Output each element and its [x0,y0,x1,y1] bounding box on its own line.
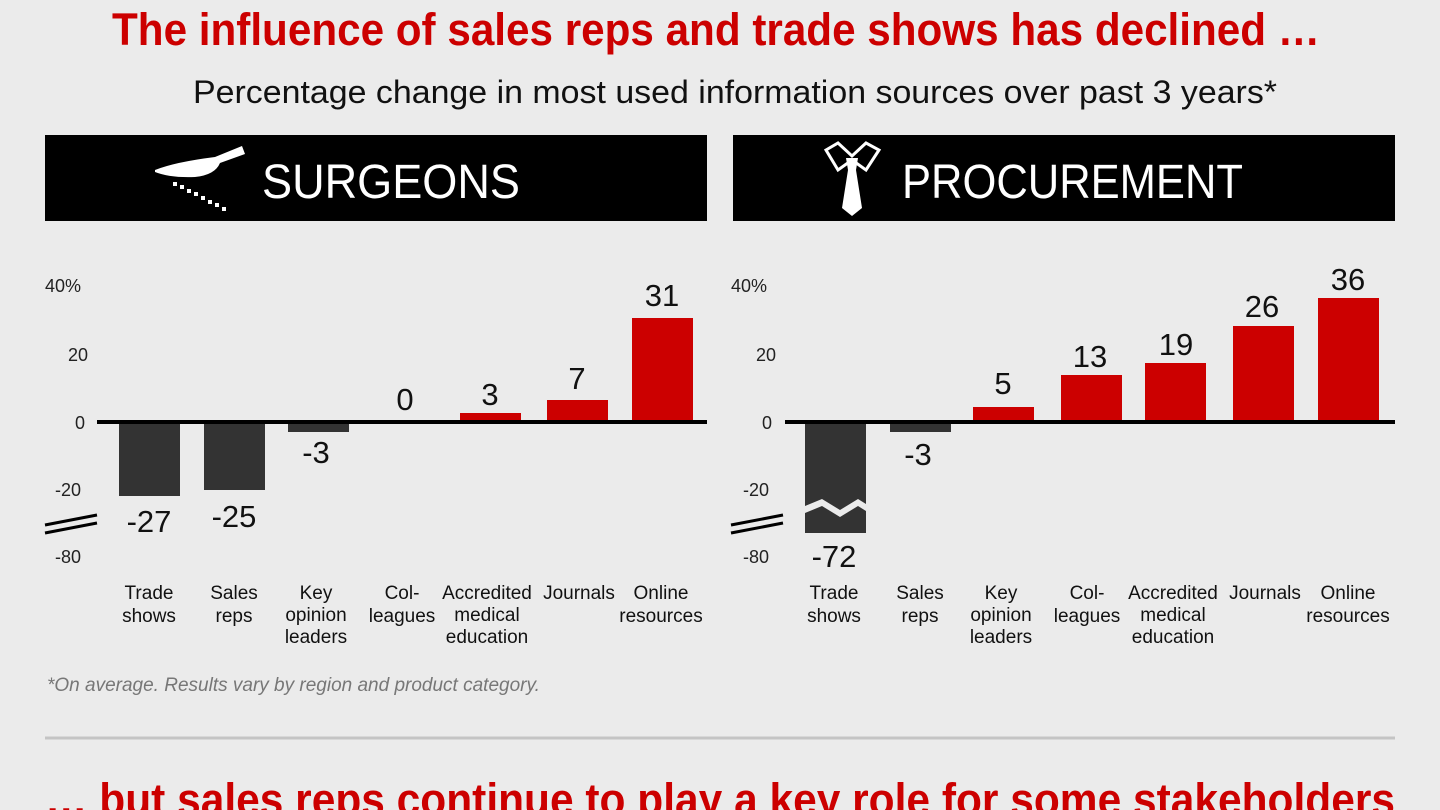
title: The influence of sales reps and trade shows has declined … [112,4,1320,55]
category labels: resources [1306,606,1390,627]
category labels: opinion [285,605,347,626]
value labels: -27 [127,504,171,539]
value labels: 19 [1159,327,1193,362]
chart: procurement [731,262,1395,648]
bars [805,422,866,533]
panel header: procurement [733,135,1395,221]
y axis labels: 0 [762,413,772,433]
y axis labels: 40% [731,276,767,296]
value labels: 13 [1073,339,1107,374]
category labels: Sales [210,583,258,604]
category labels [807,583,1390,648]
subtitle: Percentage change in most used information sources over past 3 years* [193,74,1277,110]
value labels: 7 [568,361,586,396]
y axis labels: 40% [45,276,81,296]
y axis labels [45,276,97,567]
footnote: *On average. Results vary by region and product category. [47,675,540,696]
category labels: leagues [1054,606,1120,627]
category labels: opinion [970,605,1032,626]
icon: scalpel [155,146,245,211]
value labels: 36 [1331,262,1365,297]
value labels [127,278,679,539]
chart: surgeons [45,276,707,648]
value labels: 5 [994,366,1012,401]
value labels [812,262,1365,574]
panel header: procurement: PROCUREMENT [902,156,1243,209]
y axis labels: 20 [68,345,88,365]
category labels: resources [619,606,703,627]
category labels: Online [634,583,688,604]
bars [119,422,180,496]
category labels: Key [300,583,333,604]
panel header: surgeons: SURGEONS [262,156,520,209]
y axis labels: -80 [743,547,769,567]
category labels: Trade [125,583,173,604]
value labels: 26 [1245,289,1279,324]
value labels: -3 [904,437,932,472]
icon: tie [826,143,879,216]
category labels: Sales [896,583,944,604]
panel header: surgeons [45,135,707,221]
value labels: 31 [645,278,679,313]
category labels [122,583,703,648]
value labels: -72 [812,539,856,574]
value labels: 3 [481,377,499,412]
category labels: education [446,627,528,648]
category labels: shows [807,606,861,627]
value labels: 0 [396,382,414,417]
category labels: Trade [810,583,858,604]
category labels: Key [985,583,1018,604]
category labels: leagues [369,606,435,627]
value labels: -3 [302,435,330,470]
category labels: Accredited [1128,583,1218,604]
y axis labels: 0 [75,413,85,433]
y axis labels: -20 [55,480,81,500]
category labels: reps [902,606,938,627]
y axis labels: 20 [756,345,776,365]
category labels: Accredited [442,583,532,604]
category labels: Col- [385,583,419,604]
category labels: Journals [1229,583,1301,604]
y axis labels: -80 [55,547,81,567]
value labels: -25 [212,499,256,534]
category labels: medical [1140,605,1206,626]
category labels: education [1132,627,1214,648]
category labels: shows [122,606,176,627]
y axis labels [731,276,783,567]
category labels: leaders [970,627,1032,648]
category labels: Journals [543,583,615,604]
category labels: medical [454,605,520,626]
category labels: Col- [1070,583,1104,604]
category labels: leaders [285,627,347,648]
category labels: reps [216,606,252,627]
category labels: Online [1321,583,1375,604]
y axis labels: -20 [743,480,769,500]
